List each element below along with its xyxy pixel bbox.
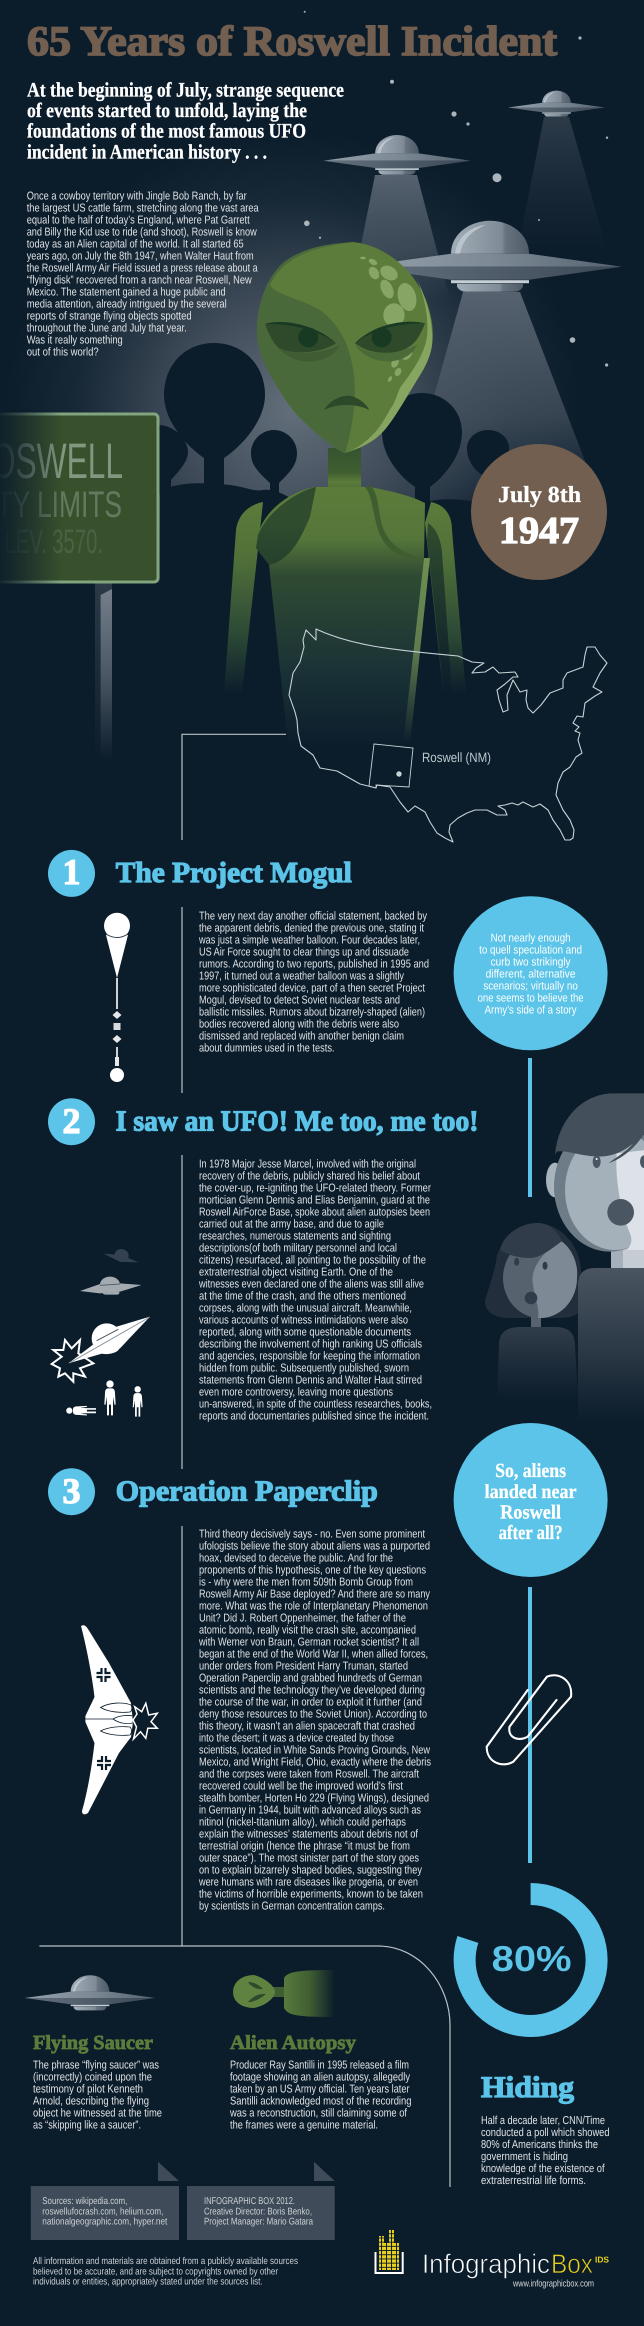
- left arm: [224, 502, 263, 693]
- lead paragraph: incident in American history . . .: [27, 141, 267, 163]
- text: as “skipping like a saucer”.: [33, 2120, 141, 2132]
- body text: paperclip: ufologists believe the story about aliens was a purported: [199, 1541, 430, 1553]
- intro paragraph: Once a cowboy territory with Jingle Bob Ranch, by far: [27, 190, 247, 202]
- note: sources: Sources: wikipedia.com,: [42, 2196, 127, 2207]
- disclaimer: believed to be accurate, and are subject to copyrights owned by other: [33, 2266, 279, 2277]
- timeline rule: [39, 734, 450, 2187]
- intro paragraph: reports of strange flying objects spotted: [27, 310, 192, 322]
- intro paragraph: today as an Alien capital of the world. It all started 65: [27, 238, 244, 250]
- logo: InfographicBox: Box: [551, 2249, 593, 2279]
- callout: not nearly enough: curb two strikingly: [491, 957, 571, 969]
- body text: witnesses: descriptions(of both military personnel and local: [199, 1242, 397, 1254]
- note: credits: Creative Director: Boris Benko,: [204, 2206, 312, 2217]
- note: sources: [31, 2162, 179, 2240]
- body text: witnesses: recovery of the debris, publicly shared his belief about: [199, 1170, 421, 1182]
- callout: so, aliens landed: So, aliens: [495, 1460, 566, 1482]
- panel: alien autopsy: [229, 1970, 412, 2132]
- eyes and mouth: [265, 322, 425, 410]
- body text: paperclip: stealth bomber, Horten Ho 229 (Flying Wings), designed: [199, 1793, 429, 1805]
- number badge 3: [48, 1468, 95, 1515]
- body text: witnesses: carried out at the army base, and due to agile: [199, 1218, 384, 1230]
- heading: Hiding: [481, 2071, 574, 2104]
- text: object he witnessed at the time: [33, 2108, 162, 2120]
- body text: paperclip: in Germany in 1944, built with advanced alloys such as: [199, 1805, 421, 1817]
- body text: Project Mogul: was just a simple weather balloon. Four decades later,: [198, 934, 420, 946]
- body text: paperclip: terrestrial origin (hence the phrase “it must be from: [199, 1841, 410, 1853]
- body text: paperclip: were humans with rare diseases like progeria, or even: [198, 1877, 418, 1889]
- intro paragraph: the Roswell Army Air Field issued a press release about a: [27, 262, 258, 274]
- body text: witnesses: and agencies, responsible for keeping the information: [199, 1350, 420, 1362]
- body text: Project Mogul: 1997, it turned out a weather balloon was a slightly: [199, 970, 404, 982]
- section 2: [48, 1098, 478, 1145]
- lead paragraph: of events started to unfold, laying the: [27, 100, 307, 122]
- title: 65 Years of Roswell Incident: [27, 19, 557, 65]
- logo: InfographicBox: IDS: [595, 2255, 609, 2265]
- stars: [304, 11, 608, 367]
- body text: paperclip: deny those resources to the Soviet Union). According to: [199, 1709, 427, 1721]
- text: The phrase “flying saucer” was: [33, 2060, 159, 2072]
- heading 2: I saw an UFO! Me too, me too!: [116, 1106, 478, 1138]
- callout: not nearly enough: different, alternative: [486, 969, 576, 981]
- text: government is hiding: [481, 2151, 568, 2163]
- intro paragraph: media attention, already intrigued by the several: [27, 298, 227, 310]
- body text: paperclip: more. What was the role of Interplanetary Phenomenon: [199, 1601, 428, 1613]
- text: was a reconstruction, still claiming some of: [229, 2108, 408, 2120]
- body text: paperclip: atomic bomb, really visit the crash site, accompanied: [199, 1625, 416, 1637]
- body text: paperclip: and the corpses were taken from Roswell. The aircraft: [199, 1769, 420, 1781]
- body text: paperclip: with Werner von Braun, German rocket scientist? It all: [198, 1637, 419, 1649]
- body text: witnesses: reported, along with some questionable documents: [199, 1326, 411, 1338]
- date badge: 1947: [499, 510, 579, 552]
- body text: witnesses: even more controversy, leaving more questions: [199, 1386, 393, 1398]
- body text: paperclip: by scientists in German concentration camps.: [199, 1901, 385, 1913]
- torso: [258, 487, 425, 745]
- icon: Horten flying wing: [81, 1625, 157, 1814]
- text: the frames were a genuine material.: [230, 2120, 378, 2132]
- body text: Project Mogul: dismissed and replaced with another benign claim: [199, 1030, 404, 1042]
- beam: front saucer: [405, 292, 600, 500]
- disclaimer: individuals or entities, appropriately stated under the sources list.: [33, 2277, 263, 2288]
- head spots: [360, 257, 419, 382]
- body text: Project Mogul: Mogul, devised to detect Soviet nuclear tests and: [199, 994, 400, 1006]
- hero background glow: [5, 130, 580, 690]
- blue connector bar: [528, 1058, 532, 1197]
- text: Producer Ray Santilli in 1995 released a film: [230, 2060, 409, 2072]
- body text: Project Mogul: US Air Force sought to clear things up and dissuade: [199, 946, 409, 958]
- logo wordmark: Infographic: [422, 2249, 550, 2279]
- callout: not nearly enough: to quell speculation and: [479, 945, 582, 957]
- body text: paperclip: began at the end of the World War II, when allied forces,: [199, 1649, 428, 1661]
- number badge 2: [48, 1098, 95, 1145]
- text: Santilli acknowledged most of the recording: [230, 2096, 412, 2108]
- intro paragraph: [27, 190, 259, 358]
- intro paragraph: the largest US cattle farm, stretching along the vast area: [27, 202, 259, 214]
- panel: flying saucer: [25, 1975, 162, 2132]
- text: footage showing an alien autopsy, allegedly: [230, 2072, 410, 2084]
- body text: witnesses: un-answered, in spite of the countless researches, books,: [199, 1398, 432, 1410]
- intro paragraph: “flying disk” recovered from a ranch near Roswell, New: [27, 274, 252, 286]
- date badge: July 8th: [498, 482, 581, 507]
- number badge 1: [48, 850, 95, 897]
- front saucer: [358, 221, 622, 292]
- body text: witnesses: researches, numerous statements and sighting: [199, 1230, 391, 1242]
- section 2: 2: [62, 1101, 80, 1141]
- man: [546, 1093, 644, 1423]
- text: [481, 2115, 610, 2187]
- woman: [485, 1223, 584, 1400]
- logo: InfographicBox: [376, 2230, 609, 2290]
- body text: witnesses: Roswell AirForce Base, spoke about alien autopsies been: [199, 1206, 430, 1218]
- text: extraterrestrial life forms.: [481, 2175, 586, 2187]
- body text: paperclip: nitinol (nickel-titanium alloy), which could perhaps: [199, 1817, 406, 1829]
- text: conducted a poll which showed: [481, 2127, 610, 2139]
- icon: paperclip: [487, 1675, 571, 1764]
- intro paragraph: years ago, on July the 8th 1947, when Walter Haut from: [27, 250, 254, 262]
- intro paragraph: Mexico. The statement gained a huge public and: [27, 286, 226, 298]
- callout: so, aliens landed: [454, 1423, 608, 1577]
- body text: Project Mogul: bodies recovered along with the debris were also: [199, 1018, 399, 1030]
- text: (incorrectly) coined upon the: [33, 2072, 152, 2084]
- section 3: 3: [62, 1471, 80, 1511]
- body text: Project Mogul: the apparent debris, denied the previous one, stating it: [199, 922, 425, 934]
- icon: saucer: [25, 1975, 155, 2010]
- body text: paperclip: Roswell Army Air Base deployed? And there are so many: [199, 1589, 430, 1601]
- body text: paperclip: the victims of horrible experiments, known to be taken: [199, 1889, 423, 1901]
- heading: Flying Saucer: [33, 2032, 153, 2054]
- grey saucer: [80, 1277, 142, 1295]
- body text: paperclip: Third theory decisively says - no. Even some prominent: [199, 1529, 426, 1541]
- body text: paperclip: Unit? Did J. Robert Oppenheimer, the father of the: [199, 1613, 406, 1625]
- body text: witnesses: the cover-up, re-igniting the UFO-related theory. Former: [199, 1182, 431, 1194]
- disclaimer: All information and materials are obtained from a publicly available sources: [33, 2256, 298, 2267]
- callout: so, aliens landed: landed near: [485, 1481, 577, 1503]
- lead paragraph: foundations of the most famous UFO: [27, 121, 306, 143]
- alien bodies: [66, 1380, 143, 1417]
- note: credits: [187, 2162, 335, 2240]
- road sign: [0, 410, 162, 760]
- body text: paperclip: into the desert; it was a device created by those: [199, 1733, 394, 1745]
- body text: paperclip: hoax, devised to deceive the public. And for the: [199, 1553, 393, 1565]
- disclaimer: [33, 2256, 298, 2288]
- note: credits: INFOGRAPHIC BOX 2012.: [204, 2196, 295, 2207]
- text: [229, 2060, 412, 2132]
- body text: paperclip: [198, 1529, 431, 1913]
- body text: witnesses: statements from Glenn Dennis and Walter Haut stirred: [199, 1374, 422, 1386]
- body text: witnesses: extraterrestrial object visiting Earth. One of the: [199, 1266, 393, 1278]
- callout: not nearly enough: one seems to believe the: [478, 993, 584, 1005]
- donut chart: 80%: [465, 1894, 597, 2026]
- explosion: [133, 1703, 157, 1739]
- panel: hiding: [481, 2071, 610, 2187]
- body text: paperclip: outer space”). The most sinister part of the story goes: [199, 1853, 419, 1865]
- body text: paperclip: this theory, it wasn’t an alien spacecraft that crashed: [199, 1721, 415, 1733]
- head: [257, 242, 433, 453]
- note: sources: nationalgeographic.com, hyper.net: [42, 2217, 168, 2228]
- map label: Roswell (NM): [422, 750, 491, 765]
- body text: Project Mogul: about dummies used in the tests.: [199, 1042, 334, 1054]
- faint distant saucer: [103, 1245, 141, 1266]
- section 3: [48, 1468, 378, 1515]
- lead paragraph: At the beginning of July, strange sequence: [27, 80, 344, 102]
- body text: paperclip: scientists and the technology they’ve developed during: [199, 1685, 425, 1697]
- sign post: [95, 583, 112, 760]
- sign board: [0, 414, 158, 582]
- intro paragraph: and Billy the Kid use to ride (and shoot), Roswell is know: [27, 226, 257, 238]
- body text: Project Mogul: rumors. According to two reports, published in 1995 and: [199, 958, 429, 970]
- New Mexico outline: [369, 744, 413, 788]
- body text: paperclip: Operation Paperclip and grabbed hundreds of German: [199, 1673, 422, 1685]
- right arm: [425, 502, 466, 693]
- body text: paperclip: scientists, located in White Sands Proving Grounds, New: [199, 1745, 431, 1757]
- body text: paperclip: under orders from President Harry Truman, started: [199, 1661, 408, 1673]
- heading: Alien Autopsy: [230, 2032, 356, 2054]
- alien figure: [224, 242, 466, 745]
- text: 80% of Americans thinks the: [481, 2139, 598, 2151]
- text: taken by an US Army official. Ten years later: [230, 2084, 410, 2096]
- intro paragraph: throughout the June and July that year.: [27, 322, 187, 334]
- Roswell dot: [396, 771, 402, 777]
- date badge: [471, 444, 607, 580]
- silhouettes of alien crowd: [0, 343, 600, 760]
- body text: witnesses: hidden from public. Subsequently published, sworn: [199, 1362, 409, 1374]
- body text: paperclip: is - why were the men from 509th Bomb Group from: [199, 1577, 413, 1589]
- logo icon: [376, 2230, 403, 2273]
- note: sources: roswellufocrash.com, helium.com,: [42, 2206, 163, 2217]
- body text: witnesses: mortician Glenn Dennis and Elias Benjamin, guard at the: [199, 1194, 430, 1206]
- icon: weather balloon: [104, 913, 130, 1082]
- body text: paperclip: the course of the war, in order to exploit it further (and: [199, 1697, 422, 1709]
- section 1: 1: [62, 852, 80, 892]
- intro paragraph: equal to the half of today’s England, where Pat Garrett: [27, 214, 250, 226]
- lead paragraph: [27, 80, 344, 163]
- section 1: [48, 850, 352, 897]
- body text: witnesses: at the time of the crash, and the others mentioned: [199, 1290, 406, 1302]
- illustration: witnesses: [485, 1093, 644, 1423]
- body text: Project Mogul: ballistic missiles. Rumors about bizarrely-shaped (alien): [199, 1006, 425, 1018]
- body text: Project Mogul: The very next day another official statement, backed by: [199, 910, 427, 922]
- callout: not nearly enough: Army’s side of a story: [485, 1005, 577, 1017]
- body text: witnesses: describing the involvement of high ranking US officials: [199, 1338, 422, 1350]
- heading 1: The Project Mogul: [116, 857, 352, 889]
- callout: not nearly enough: [454, 896, 608, 1050]
- body text: witnesses: corpses, along with the unusual aircraft. Meanwhile,: [199, 1302, 412, 1314]
- text: Half a decade later, CNN/Time: [481, 2115, 605, 2127]
- text: testimony of pilot Kenneth: [33, 2084, 143, 2096]
- icon: crash sequence: [52, 1245, 150, 1417]
- body text: paperclip: Mexico, and Wright Field, Ohio, exactly where the debris: [199, 1757, 431, 1769]
- text: Arnold, describing the flying: [33, 2096, 149, 2108]
- body text: witnesses: citizens) resurfaced, all pointing to the possibility of the: [199, 1254, 426, 1266]
- icon: alien on table: [233, 1970, 335, 2017]
- note: credits: Project Manager: Mario Gatara: [204, 2217, 313, 2228]
- donut chart: 80%: 80%: [492, 1938, 572, 1979]
- callout: so, aliens landed: Roswell: [500, 1502, 561, 1524]
- crashing saucer and explosion: [52, 1317, 150, 1382]
- body text: paperclip: proponents of this hypothesis, one of the key questions: [199, 1565, 426, 1577]
- body text: paperclip: recovered could well be the improved world’s first: [199, 1781, 404, 1793]
- body text: Project Mogul: more sophisticated device, part of a then secret Project: [199, 982, 426, 994]
- callout: not nearly enough: scenarios; virtually no: [483, 981, 578, 993]
- body text: witnesses: [198, 1158, 432, 1422]
- body text: witnesses: reports and documentaries published since the incident.: [199, 1410, 429, 1422]
- intro paragraph: out of this world?: [27, 346, 99, 358]
- cross markings: [96, 1668, 111, 1770]
- beam: far saucer: [517, 117, 608, 253]
- blue connector bar with paperclip: [487, 1587, 571, 1863]
- body text: paperclip: on to explain bizarrely shaped bodies, suggesting they: [199, 1865, 422, 1877]
- far saucer: [508, 91, 605, 117]
- middle saucer: [323, 135, 471, 175]
- text: [33, 2060, 162, 2132]
- body text: Project Mogul: [198, 910, 429, 1054]
- body text: paperclip: explain the witnesses’ statements about debris not of: [199, 1829, 419, 1841]
- text: knowledge of the existence of: [481, 2163, 605, 2175]
- neck: [328, 448, 361, 490]
- callout: so, aliens landed: after all?: [499, 1522, 563, 1544]
- body text: witnesses: In 1978 Major Jesse Marcel, involved with the original: [199, 1158, 416, 1170]
- body text: witnesses: witnesses even declared one of the aliens was still alive: [198, 1278, 424, 1290]
- callout: not nearly enough: Not nearly enough: [491, 933, 571, 945]
- body text: witnesses: various accounts of witness intimidations were also: [199, 1314, 408, 1326]
- intro paragraph: Was it really something: [27, 334, 123, 346]
- map of the USA with Roswell marked: [289, 629, 607, 842]
- beam: middle saucer: [350, 175, 450, 300]
- logo: InfographicBox: www.infographicbox.com: [512, 2279, 594, 2290]
- heading 3: Operation Paperclip: [116, 1476, 378, 1508]
